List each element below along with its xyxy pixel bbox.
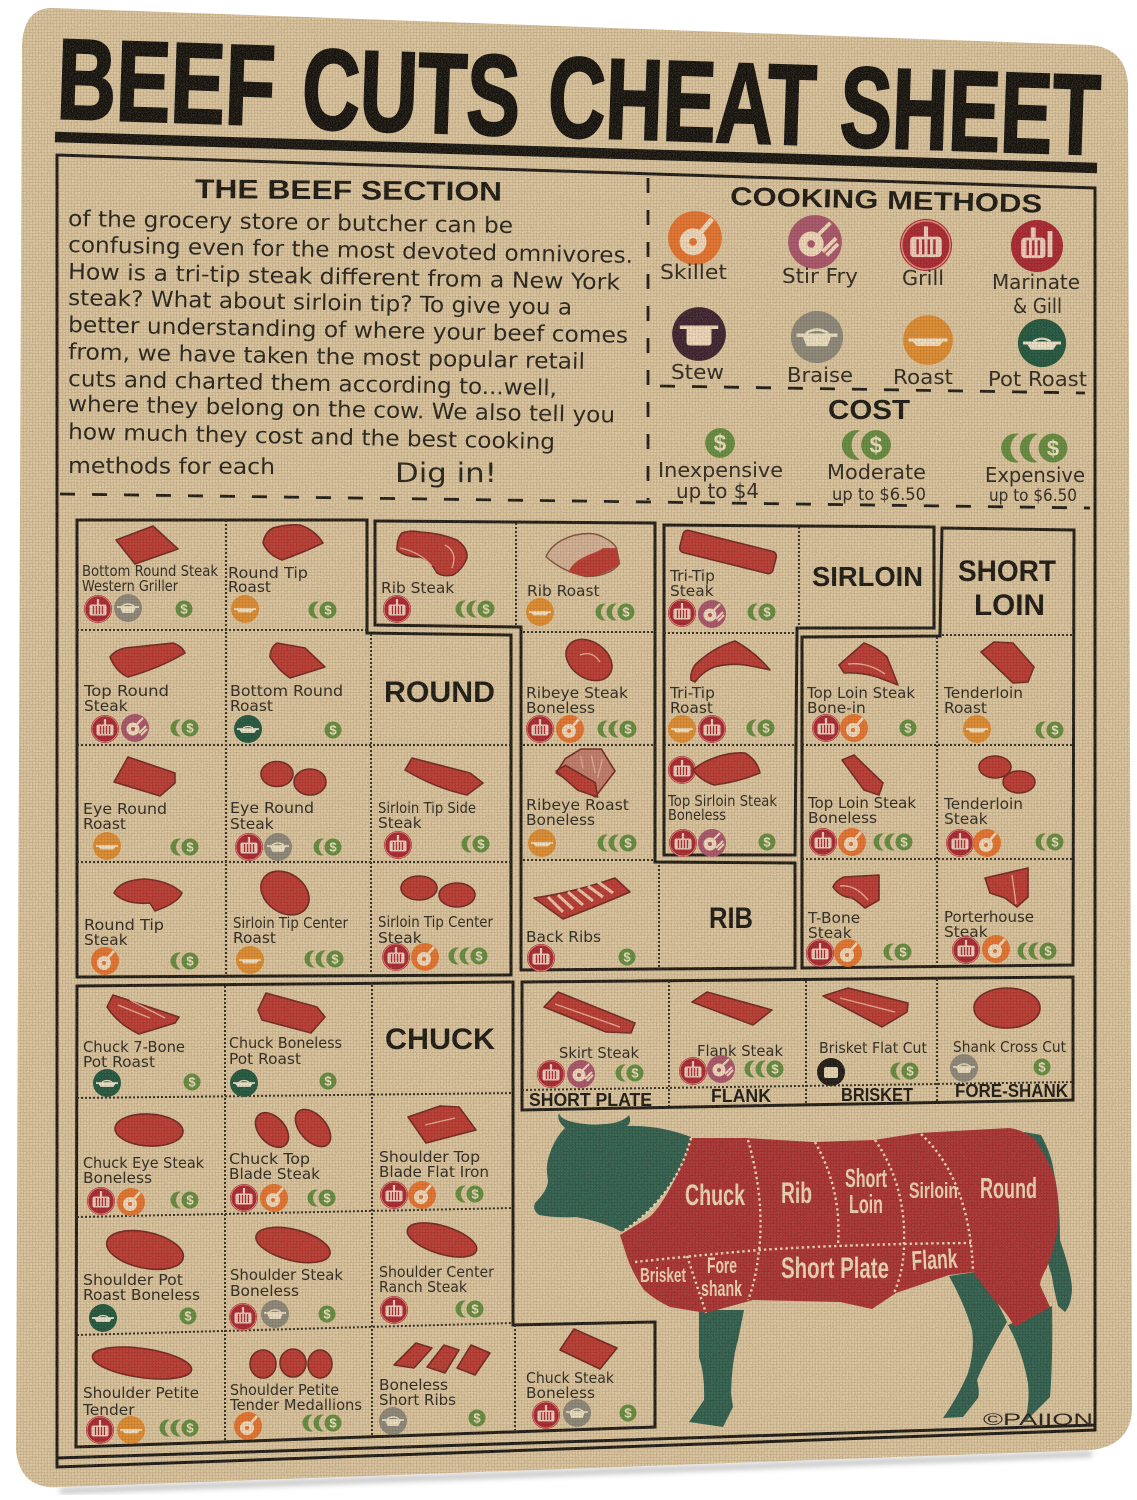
cut: Boneless Short Ribs: Short Ribs bbox=[379, 1391, 456, 1409]
cut: Shoulder Pot Roast Boneless: Shoulder Pot bbox=[83, 1271, 183, 1289]
cut: Brisket Flat Cut: Brisket Flat Cut bbox=[819, 1039, 927, 1057]
cut: Top Loin Steak Bone-in: Bone-in bbox=[807, 699, 866, 717]
cut: Top Loin Steak Bone-in bbox=[806, 643, 916, 742]
method: stew bbox=[671, 307, 726, 384]
cut: Top Sirloin Steak Boneless bbox=[667, 753, 777, 857]
cut: Bottom Round Steak Western Griller: Western Griller bbox=[82, 577, 179, 595]
cut: Bottom Round Steak Western Griller bbox=[82, 526, 218, 623]
heading: the beef section: THE BEEF SECTION bbox=[195, 174, 502, 207]
cut: Skirt Steak: Skirt Steak bbox=[559, 1044, 639, 1062]
cut: Eye Round Steak: Eye Round bbox=[230, 799, 314, 817]
cut: Chuck Eye Steak Boneless: Boneless bbox=[83, 1169, 152, 1187]
cut: Chuck Boneless Pot Roast: Pot Roast bbox=[229, 1050, 301, 1068]
section label: rib: RIB bbox=[709, 902, 753, 935]
cut: Porterhouse Steak bbox=[944, 868, 1056, 964]
cut: Shoulder Steak Boneless: Shoulder Steak bbox=[230, 1266, 343, 1284]
cut: Shoulder Center Ranch Steak: Ranch Steak bbox=[379, 1278, 467, 1296]
heading: cooking methods: COOKING METHODS bbox=[730, 181, 1042, 219]
copyright mark: ©PAIION bbox=[983, 1410, 1093, 1429]
cut: Shoulder Top Blade Flat Iron: Shoulder Top bbox=[379, 1148, 480, 1166]
cut: Porterhouse Steak: Porterhouse bbox=[944, 908, 1034, 926]
cut: Chuck Top Blade Steak bbox=[229, 1103, 337, 1212]
cut: Tenderloin Steak: Tenderloin bbox=[943, 795, 1023, 813]
cost: inexpensive: up to $4 bbox=[676, 479, 759, 503]
section label: sirloin: SIRLOIN bbox=[812, 561, 923, 592]
cut: Rib Roast bbox=[526, 534, 634, 626]
cut: Shoulder Pot Roast Boneless bbox=[83, 1224, 200, 1332]
method: marinate and grill bbox=[992, 220, 1080, 318]
cow: dotted cut lines bbox=[622, 1134, 973, 1313]
cut: Shoulder Center Ranch Steak: Shoulder Center bbox=[379, 1263, 495, 1281]
cut: Back Ribs: Back Ribs bbox=[526, 928, 601, 946]
outer frame bbox=[57, 155, 1095, 1467]
cut: Brisket Flat Cut bbox=[817, 988, 927, 1086]
section label: round: ROUND bbox=[384, 676, 495, 709]
intro paragraph: methods for each bbox=[68, 454, 275, 480]
method: braise bbox=[787, 311, 853, 387]
cow: region names: Sirloin bbox=[909, 1178, 958, 1203]
cut: Flank Steak: Flank Steak bbox=[697, 1042, 783, 1060]
cut: Ribeye Steak Boneless: Boneless bbox=[526, 699, 595, 717]
cost: inexpensive bbox=[658, 428, 783, 503]
cut: Top Loin Steak Bone-in: Top Loin Steak bbox=[806, 684, 915, 702]
method: grill: Grill bbox=[902, 266, 944, 290]
title: BEEF bbox=[55, 16, 277, 150]
cut: Chuck Top Blade Steak: Chuck Top bbox=[229, 1150, 310, 1168]
cut: Chuck 7-Bone Pot Roast bbox=[83, 995, 200, 1097]
cut: Shoulder Petite Tender: Shoulder Petite bbox=[83, 1384, 199, 1402]
cut: Tri-Tip Roast: Tri-Tip bbox=[669, 684, 715, 702]
cut: Shoulder Petite Tender: Tender bbox=[82, 1401, 135, 1419]
method: stew: Stew bbox=[671, 360, 724, 384]
intro paragraph: cuts and charted them according to...well, bbox=[68, 367, 557, 401]
cut: Round Tip Steak: Round Tip bbox=[84, 916, 164, 934]
cut: Eye Round Roast: Eye Round bbox=[83, 800, 167, 818]
cut: Chuck Eye Steak Boneless bbox=[83, 1112, 204, 1216]
method: skillet bbox=[660, 211, 727, 284]
cut: Shoulder Petite Tender Medallions: Shoulder Petite bbox=[230, 1381, 339, 1399]
cut: Ribeye Roast Boneless bbox=[526, 749, 636, 857]
cut: Bottom Round Roast: Roast bbox=[230, 697, 273, 715]
panel: cooking methods legend bbox=[660, 181, 1087, 391]
cost: moderate bbox=[827, 428, 926, 505]
cost: expensive bbox=[985, 432, 1085, 506]
dig in: Dig in! bbox=[395, 458, 497, 489]
cut: Tri-Tip Steak: Steak bbox=[670, 582, 714, 600]
cut: T-Bone Steak: Steak bbox=[808, 924, 852, 942]
cut: Bottom Round Steak Western Griller: Bottom Round Steak bbox=[82, 562, 218, 580]
cut: Bottom Round Roast bbox=[230, 643, 343, 743]
cut: Tri-Tip Steak bbox=[668, 529, 777, 628]
cow: region names bbox=[640, 1163, 1037, 1301]
method: stir fry bbox=[782, 215, 858, 288]
section label: short loin: SHORT bbox=[958, 555, 1056, 588]
cost: expensive: up to $6.50 bbox=[989, 486, 1077, 506]
cow: region names: Flank bbox=[911, 1244, 959, 1276]
cut: Ribeye Roast Boneless: Ribeye Roast bbox=[526, 796, 629, 814]
intro paragraph: from, we have taken the most popular retail bbox=[68, 340, 585, 375]
cut: Round Tip Roast: Round Tip bbox=[228, 564, 308, 582]
cut: Shoulder Top Blade Flat Iron: Blade Flat Iron bbox=[379, 1163, 489, 1181]
cut: Sirloin Tip Center Steak: Steak bbox=[378, 929, 422, 947]
cut: Ribeye Roast Boneless: Boneless bbox=[526, 811, 595, 829]
cost: moderate: up to $6.50 bbox=[832, 485, 926, 505]
cut: Top Loin Steak Boneless: Top Loin Steak bbox=[807, 794, 916, 812]
cow: region names: Chuck bbox=[685, 1179, 745, 1212]
cut: Eye Round Roast bbox=[83, 757, 198, 860]
cut: Sirloin Tip Center Steak bbox=[378, 876, 494, 971]
section label: fore-shank: FORE-SHANK bbox=[955, 1081, 1068, 1101]
cut: Boneless Short Ribs bbox=[379, 1343, 490, 1435]
cut: Top Loin Steak Boneless bbox=[807, 755, 916, 856]
intro paragraph: how much they cost and the best cooking bbox=[68, 420, 555, 455]
cut: Shoulder Petite Tender bbox=[82, 1342, 199, 1444]
intro paragraph: of the grocery store or butcher can be bbox=[68, 207, 513, 239]
cut: Sirloin Tip Center Roast: Roast bbox=[233, 929, 276, 947]
cut: Rib Steak bbox=[381, 531, 494, 623]
cut: Shoulder Steak Boneless: Boneless bbox=[230, 1282, 299, 1300]
method: marinate and grill: Marinate bbox=[992, 270, 1080, 294]
cow: green head bbox=[534, 1113, 691, 1232]
section outlines bbox=[76, 520, 1074, 1447]
cut: Chuck Top Blade Steak: Blade Steak bbox=[229, 1165, 320, 1183]
cut: Tri-Tip Steak: Tri-Tip bbox=[669, 567, 715, 585]
cut: Shoulder Top Blade Flat Iron bbox=[379, 1106, 489, 1209]
cut: T-Bone Steak bbox=[806, 875, 912, 967]
cut: Shank Cross Cut: Shank Cross Cut bbox=[953, 1038, 1066, 1056]
method: skillet: Skillet bbox=[660, 260, 727, 284]
cut: Sirloin Tip Center Roast bbox=[233, 862, 349, 974]
method: roast bbox=[893, 315, 953, 389]
cut: Top Round Steak: Steak bbox=[84, 697, 128, 715]
cut: Shoulder Center Ranch Steak bbox=[379, 1216, 495, 1324]
cut: Top Round Steak: Top Round bbox=[83, 682, 169, 700]
title: CHEAT bbox=[546, 34, 818, 170]
cow: red body bbox=[620, 1128, 1059, 1327]
cut: Skirt Steak bbox=[537, 992, 644, 1088]
cut: Top Loin Steak Boneless: Boneless bbox=[808, 809, 877, 827]
intro paragraph bbox=[68, 207, 633, 480]
panel: the beef section intro bbox=[68, 174, 633, 489]
cut: Top Sirloin Steak Boneless: Top Sirloin Steak bbox=[667, 792, 777, 810]
cut: Tenderloin Roast bbox=[943, 642, 1064, 743]
cut: Chuck Eye Steak Boneless: Chuck Eye Steak bbox=[83, 1154, 204, 1172]
cow: region names: shank bbox=[701, 1276, 742, 1301]
cut: Eye Round Roast: Roast bbox=[83, 815, 126, 833]
cut: Tenderloin Roast: Roast bbox=[944, 699, 987, 717]
section label: short loin: LOIN bbox=[974, 589, 1045, 622]
cut: Shoulder Steak Boneless bbox=[229, 1221, 343, 1331]
method: roast: Roast bbox=[893, 365, 953, 389]
cut: Flank Steak bbox=[679, 992, 784, 1085]
cow: region names: Rib bbox=[781, 1177, 812, 1210]
cut: Tenderloin Roast: Tenderloin bbox=[943, 684, 1023, 702]
cut: Round Tip Roast bbox=[228, 525, 336, 623]
cut: Chuck 7-Bone Pot Roast: Chuck 7-Bone bbox=[83, 1038, 185, 1056]
cost: expensive: Expensive bbox=[985, 463, 1085, 487]
cut: Boneless Short Ribs: Boneless bbox=[379, 1376, 448, 1394]
method: grill bbox=[900, 219, 952, 290]
section label: flank: FLANK bbox=[711, 1086, 771, 1106]
cut: Top Sirloin Steak Boneless: Boneless bbox=[668, 806, 726, 824]
cut: Ribeye Steak Boneless bbox=[526, 631, 636, 743]
title: CUTS bbox=[300, 26, 522, 160]
section label: chuck: CHUCK bbox=[385, 1023, 495, 1056]
intro paragraph: How is a tri-tip steak different from a New York bbox=[68, 260, 621, 296]
method: marinate and grill: & Gill bbox=[1013, 294, 1062, 318]
cut: Chuck Steak Boneless: Boneless bbox=[526, 1384, 595, 1402]
cut: Chuck Boneless Pot Roast bbox=[229, 993, 342, 1097]
method: pot roast bbox=[988, 319, 1087, 391]
cut: Rib Roast: Rib Roast bbox=[527, 582, 600, 600]
cut: Round Tip Steak: Steak bbox=[84, 931, 128, 949]
cut: Shoulder Petite Tender Medallions bbox=[229, 1349, 362, 1440]
cut: Shoulder Pot Roast Boneless: Roast Boneless bbox=[83, 1286, 200, 1304]
cost: inexpensive: Inexpensive bbox=[658, 458, 783, 482]
cut: Chuck Steak Boneless: Chuck Steak bbox=[526, 1369, 614, 1387]
cut: Sirloin Tip Side Steak: Steak bbox=[378, 814, 422, 832]
cow: region names: Fore bbox=[707, 1253, 737, 1278]
intro paragraph: steak? What about sirloin tip? To give you a bbox=[68, 286, 572, 321]
cost: moderate: Moderate bbox=[827, 460, 926, 484]
cut: Rib Steak: Rib Steak bbox=[381, 579, 454, 597]
intro paragraph: confusing even for the most devoted omnivores. bbox=[68, 233, 633, 269]
cow: region names: Round bbox=[980, 1173, 1037, 1205]
method: pot roast: Pot Roast bbox=[988, 367, 1087, 391]
cut: Sirloin Tip Center Roast: Sirloin Tip Center bbox=[233, 914, 349, 932]
section label: short plate: SHORT PLATE bbox=[529, 1090, 652, 1110]
cut: Round Tip Roast: Roast bbox=[228, 578, 271, 596]
title bbox=[55, 16, 1102, 180]
cut: Tri-Tip Roast bbox=[668, 641, 774, 743]
dashed dividers bbox=[60, 178, 1090, 508]
cut: Shoulder Petite Tender Medallions: Tender Medallions bbox=[229, 1396, 362, 1414]
method: stir fry: Stir Fry bbox=[782, 264, 858, 288]
cut: Round Tip Steak bbox=[84, 879, 198, 975]
cut: Back Ribs bbox=[526, 878, 636, 972]
cut: Chuck Boneless Pot Roast: Chuck Boneless bbox=[229, 1034, 342, 1052]
cut: Sirloin Tip Center Steak: Sirloin Tip Center bbox=[378, 913, 494, 931]
cut: Top Round Steak bbox=[83, 643, 198, 743]
cow: region names: Loin bbox=[849, 1189, 883, 1219]
cow: region names: Brisket bbox=[640, 1265, 686, 1287]
cut: Ribeye Steak Boneless: Ribeye Steak bbox=[526, 684, 628, 702]
cut: Bottom Round Roast: Bottom Round bbox=[230, 682, 343, 700]
cut: T-Bone Steak: T-Bone bbox=[807, 909, 860, 927]
plate shadow bbox=[60, 1454, 1092, 1491]
cut: Shank Cross Cut bbox=[950, 988, 1066, 1082]
cut: Tenderloin Steak: Steak bbox=[944, 810, 988, 828]
cut: Chuck 7-Bone Pot Roast: Pot Roast bbox=[83, 1053, 155, 1071]
method: braise: Braise bbox=[787, 363, 853, 387]
cow: region names: Short Plate bbox=[781, 1252, 889, 1285]
cow: region names: Short bbox=[845, 1163, 887, 1193]
cow diagram bbox=[534, 1113, 1072, 1427]
intro paragraph: better understanding of where your beef comes bbox=[68, 313, 628, 349]
cut: Eye Round Steak: Steak bbox=[230, 815, 274, 833]
cut: Sirloin Tip Side Steak bbox=[378, 758, 490, 859]
section label: short loin bbox=[958, 555, 1056, 622]
cow: green tail and legs bbox=[689, 1132, 1072, 1427]
section label: brisket: BRISKET bbox=[841, 1085, 913, 1105]
cut: Tri-Tip Roast: Roast bbox=[670, 699, 713, 717]
cut: Sirloin Tip Side Steak: Sirloin Tip Side bbox=[378, 799, 476, 817]
cut: Tenderloin Steak bbox=[943, 756, 1064, 857]
panel: cost legend bbox=[658, 394, 1085, 506]
cut: Porterhouse Steak: Steak bbox=[944, 923, 988, 941]
heading: cost: COST bbox=[828, 394, 910, 425]
cut: Chuck Steak Boneless bbox=[526, 1329, 636, 1429]
cut: Eye Round Steak bbox=[230, 762, 342, 861]
intro paragraph: where they belong on the cow. We also tell you bbox=[68, 392, 615, 428]
